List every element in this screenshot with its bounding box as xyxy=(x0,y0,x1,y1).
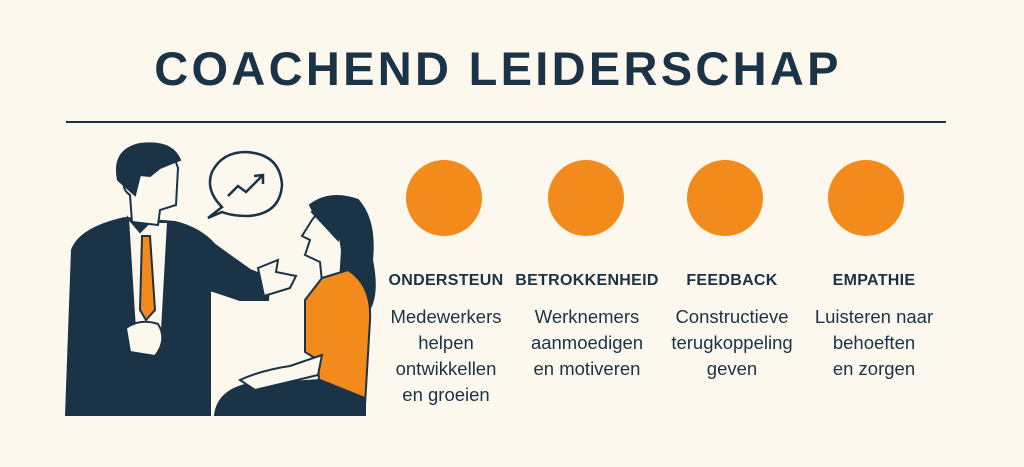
panel: betrokkenheid: BETROKKENHEID xyxy=(515,272,659,289)
panel: betrokkenheid: Werknemers xyxy=(535,306,639,327)
panel: ondersteun: ONDERSTEUN xyxy=(388,272,504,289)
man xyxy=(66,143,296,415)
panel: empathie: behoeften xyxy=(833,332,915,353)
icon: speech bubble with growth arrow xyxy=(208,152,282,218)
panel: betrokkenheid: aanmoedigen xyxy=(531,332,643,353)
panel: ondersteun: Medewerkers xyxy=(390,306,502,327)
panel: empathie xyxy=(815,160,933,379)
panel: feedback: FEEDBACK xyxy=(686,272,778,289)
panel: feedback xyxy=(671,160,793,379)
panel: feedback: geven xyxy=(707,358,757,379)
panel: feedback: terugkoppeling xyxy=(671,332,793,353)
illustration: coach and employee xyxy=(64,142,376,416)
panel: ondersteun: helpen xyxy=(418,332,474,353)
panel: ondersteun xyxy=(388,160,504,405)
woman xyxy=(215,196,375,415)
panel: ondersteun: en groeien xyxy=(402,384,490,405)
panel: betrokkenheid xyxy=(515,160,659,379)
title: COACHEND LEIDERSCHAP xyxy=(154,42,842,95)
panel: ondersteun: ontwikkellen xyxy=(396,358,496,379)
panel: empathie: en zorgen xyxy=(833,358,915,379)
panel: feedback: Constructieve xyxy=(675,306,789,327)
panel: empathie: Luisteren naar xyxy=(815,306,933,327)
panel: empathie: EMPATHIE xyxy=(833,272,915,289)
panel: betrokkenheid: en motiveren xyxy=(534,358,640,379)
